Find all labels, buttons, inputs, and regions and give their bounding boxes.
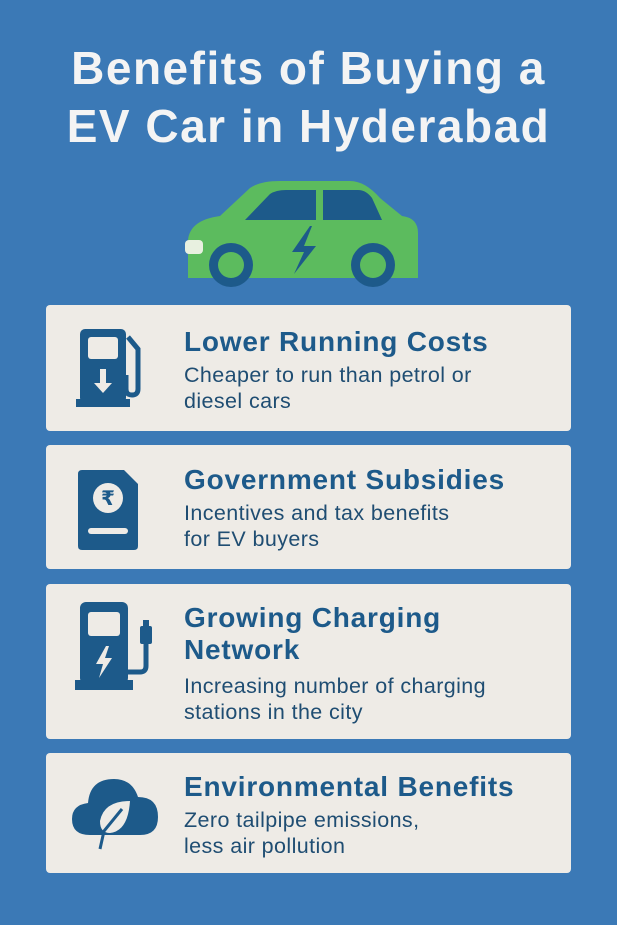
heading [184,602,441,665]
body text [184,501,449,551]
body text [184,808,419,858]
body text [184,363,472,413]
panel: government subsidies [46,445,571,569]
body text: Incentives and tax benefits [184,501,449,525]
body text: Zero tailpipe emissions, [184,808,419,832]
body text: for EV buyers [184,527,319,551]
icon: fuel pump [76,329,140,407]
body text [184,674,486,724]
panel: lower running costs [46,305,571,431]
heading: Growing Charging [184,602,441,633]
heading: Lower Running Costs [184,326,489,357]
icon: rupee document: ₹ [101,486,115,510]
heading: Network [184,634,300,665]
panel: growing charging network [46,584,571,739]
body text: less air pollution [184,834,345,858]
icon: cloud with leaf [72,779,158,850]
body text: stations in the city [184,700,363,724]
body text: diesel cars [184,389,291,413]
icon: rupee document [78,470,138,550]
body text: Increasing number of charging [184,674,486,698]
icon: green electric car [185,181,418,287]
heading: Environmental Benefits [184,771,514,802]
body text: Cheaper to run than petrol or [184,363,472,387]
icon: EV charger [75,602,152,690]
title [67,42,550,152]
title: Benefits of Buying a [71,42,546,94]
heading: Government Subsidies [184,464,505,495]
panel: environmental benefits [46,753,571,873]
title: EV Car in Hyderabad [67,100,550,152]
